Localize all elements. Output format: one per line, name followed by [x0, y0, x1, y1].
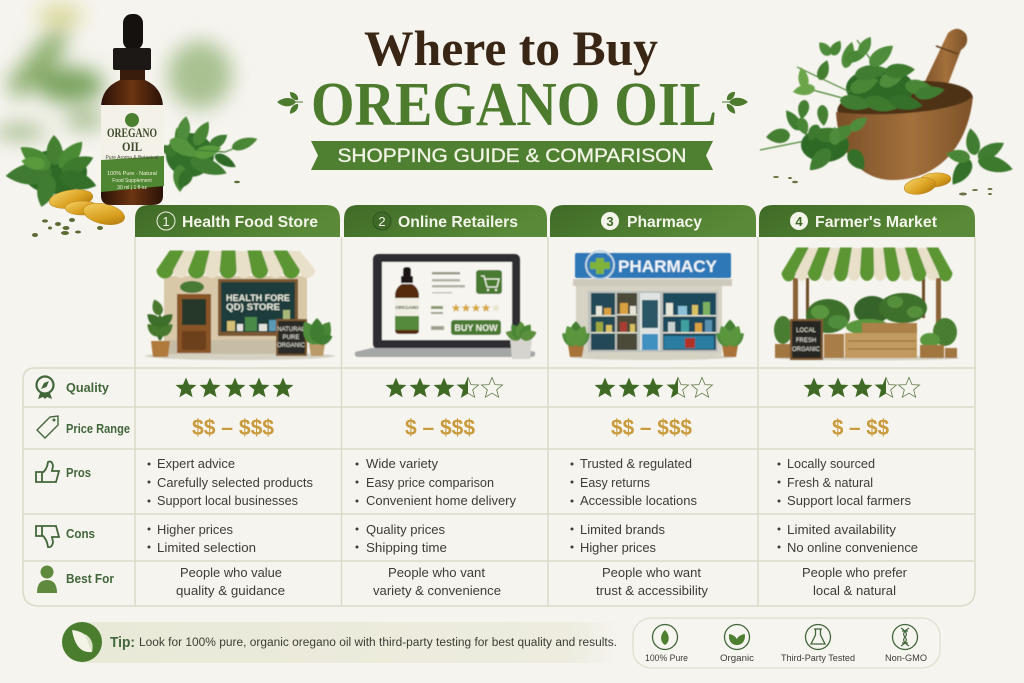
pros: farmers market: Support local farmers: [787, 493, 911, 508]
pros: farmers market: Locally sourced: [787, 456, 875, 471]
pros: pharmacy: Accessible locations: [580, 493, 697, 508]
pros: online retailers: Easy price comparison: [366, 475, 494, 490]
quality stars: pharmacy: [594, 378, 712, 397]
illustration: health food store: NATURAL: [277, 327, 305, 333]
badge: non-gmo: Non-GMO: [885, 653, 927, 663]
illustration: laptop online store: BUY NOW: [454, 323, 498, 333]
icon: title leaf right: [722, 90, 748, 115]
pros: online retailers: Convenient home delivery: [366, 493, 516, 508]
cons: farmers market: [778, 522, 918, 555]
header tab: pharmacy: 3: [606, 214, 614, 229]
pros: farmers market: [778, 456, 911, 508]
pros: online retailers: Wide variety: [366, 456, 438, 471]
best for: farmers market: [802, 565, 908, 598]
row label: quality: Quality: [66, 380, 110, 395]
mortar and pestle with herbs: [760, 29, 1015, 189]
header tab: health food store: 1: [162, 214, 170, 229]
cons: online retailers: [356, 522, 447, 555]
comparison table grid: [23, 237, 975, 606]
row label: price range: Price Range: [66, 421, 130, 436]
header tab: farmer's market: 4: [795, 214, 803, 229]
row label: pros: [36, 462, 91, 482]
illustration: laptop online store: [355, 254, 538, 359]
best for: pharmacy: People who want: [602, 565, 701, 580]
quality stars: health food store: [176, 378, 294, 397]
cons: pharmacy: [570, 522, 665, 555]
price: online retailers: $ – $$$: [405, 415, 475, 440]
row label: quality: [36, 376, 110, 399]
softgels right: [903, 172, 952, 197]
ribbon subtitle: SHOPPING GUIDE & COMPARISON: [338, 146, 686, 167]
illustration: health food store: HEALTH FORE: [226, 293, 290, 303]
illustration: health food store: QD) STORE: [226, 302, 280, 312]
best for: pharmacy: trust & accessibility: [596, 583, 708, 598]
row label: best for: [37, 566, 114, 593]
oil bottle: 30 ml | 1 fl oz: [117, 185, 147, 191]
price: farmers market: $ – $$: [832, 415, 889, 440]
blurred herb background: [0, 5, 232, 138]
cons: health food store: Limited selection: [157, 540, 256, 555]
ribbon subtitle: [311, 141, 713, 170]
price: health food store: $$ – $$$: [192, 415, 274, 440]
badge: third-party tested: Third-Party Tested: [781, 653, 855, 663]
illustration: health food store: [144, 251, 336, 360]
oil bottle: [101, 14, 164, 205]
best for: online retailers: variety & convenience: [373, 583, 501, 598]
cons: pharmacy: Higher prices: [580, 540, 656, 555]
header tab: health food store: [135, 205, 340, 237]
best for: health food store: People who value: [180, 565, 282, 580]
best for: health food store: quality & guidance: [176, 583, 285, 598]
best for: farmers market: local & natural: [813, 583, 896, 598]
cons: farmers market: No online convenience: [787, 540, 918, 555]
quality stars: online retailers: [386, 378, 502, 397]
pros: health food store: Support local businesses: [157, 493, 298, 508]
best for: online retailers: People who vant: [388, 565, 485, 580]
cons: health food store: Higher prices: [157, 522, 233, 537]
oil bottle: 100% Pure · Natural: [107, 171, 157, 177]
tip banner: Tip:: [110, 634, 135, 651]
row label: cons: [36, 526, 95, 547]
spice specks left: [32, 181, 240, 237]
icon: title leaf left: [277, 90, 303, 115]
badge: 100% pure: 100% Pure: [645, 653, 688, 663]
pros: pharmacy: [570, 456, 697, 508]
row label: pros: Pros: [66, 465, 91, 480]
softgels left: [48, 187, 127, 228]
spice specks right: [773, 176, 992, 196]
pros: health food store: [148, 456, 313, 508]
illustration: farmers market stall: FRESH: [796, 338, 816, 344]
cons: online retailers: Shipping time: [366, 540, 447, 555]
row label: best for: Best For: [66, 571, 114, 586]
illustration: pharmacy: [559, 251, 747, 360]
right herb cluster: [159, 115, 259, 192]
header tab: online retailers: 2: [378, 214, 386, 229]
title: where to buy: Where to Buy: [364, 20, 658, 76]
illustration: health food store: ORGANIC: [277, 343, 306, 349]
illustration: health food store: PURE: [283, 335, 299, 341]
badge: organic: [720, 624, 755, 663]
illustration: farmers market stall: LOCAL: [796, 328, 816, 334]
best for: farmers market: People who prefer: [802, 565, 908, 580]
tip banner: Look for 100% pure, organic oregano oil with third-party testing for best quality and results.: [139, 637, 617, 649]
oil bottle: OREGANO: [107, 125, 157, 140]
header tab: farmer's market: Farmer's Market: [815, 214, 938, 231]
header tab: health food store: Health Food Store: [182, 214, 318, 231]
cons: pharmacy: Limited brands: [580, 522, 665, 537]
pros: health food store: Carefully selected products: [157, 475, 313, 490]
cons: health food store: [148, 522, 256, 555]
badge: third-party tested: [781, 624, 855, 663]
pros: pharmacy: Easy returns: [580, 475, 650, 490]
illustration: laptop online store: OREGANO: [395, 305, 419, 310]
title: oregano oil: OREGANO OIL: [311, 71, 717, 139]
best for: online retailers: [373, 565, 501, 598]
cons: online retailers: Quality prices: [366, 522, 446, 537]
illustration: pharmacy: PHARMACY: [618, 257, 718, 276]
header tab: pharmacy: [550, 205, 756, 237]
oil bottle: OIL: [122, 139, 142, 154]
best for: pharmacy: [596, 565, 708, 598]
left herb cluster: [5, 135, 99, 209]
badge: organic: Organic: [720, 653, 755, 663]
header tab: online retailers: [344, 205, 547, 237]
row label: cons: Cons: [66, 526, 95, 541]
row label: price range: [37, 416, 130, 438]
quality stars: farmers market: [804, 378, 920, 397]
header tab: online retailers: Online Retailers: [398, 214, 518, 231]
oil bottle: Food Supplement: [112, 178, 152, 184]
header tab: pharmacy: Pharmacy: [627, 214, 702, 231]
pros: health food store: Expert advice: [157, 456, 235, 471]
illustration: farmers market stall: ORGANIC: [792, 347, 821, 353]
header tab: farmer's market: [759, 205, 975, 237]
illustration: farmers market stall: [774, 248, 960, 360]
best for: health food store: [176, 565, 285, 598]
oil bottle: Pure Aroma & Botanical: [105, 155, 159, 161]
badge panel: [633, 618, 940, 668]
pros: online retailers: [356, 456, 516, 508]
pros: farmers market: Fresh & natural: [787, 475, 873, 490]
price: pharmacy: $$ – $$$: [611, 415, 692, 440]
tip banner: [62, 622, 621, 663]
badge: non-gmo: [885, 624, 927, 663]
badge: 100% pure: [645, 624, 688, 663]
pros: pharmacy: Trusted & regulated: [580, 456, 692, 471]
cons: farmers market: Limited availability: [787, 522, 897, 537]
